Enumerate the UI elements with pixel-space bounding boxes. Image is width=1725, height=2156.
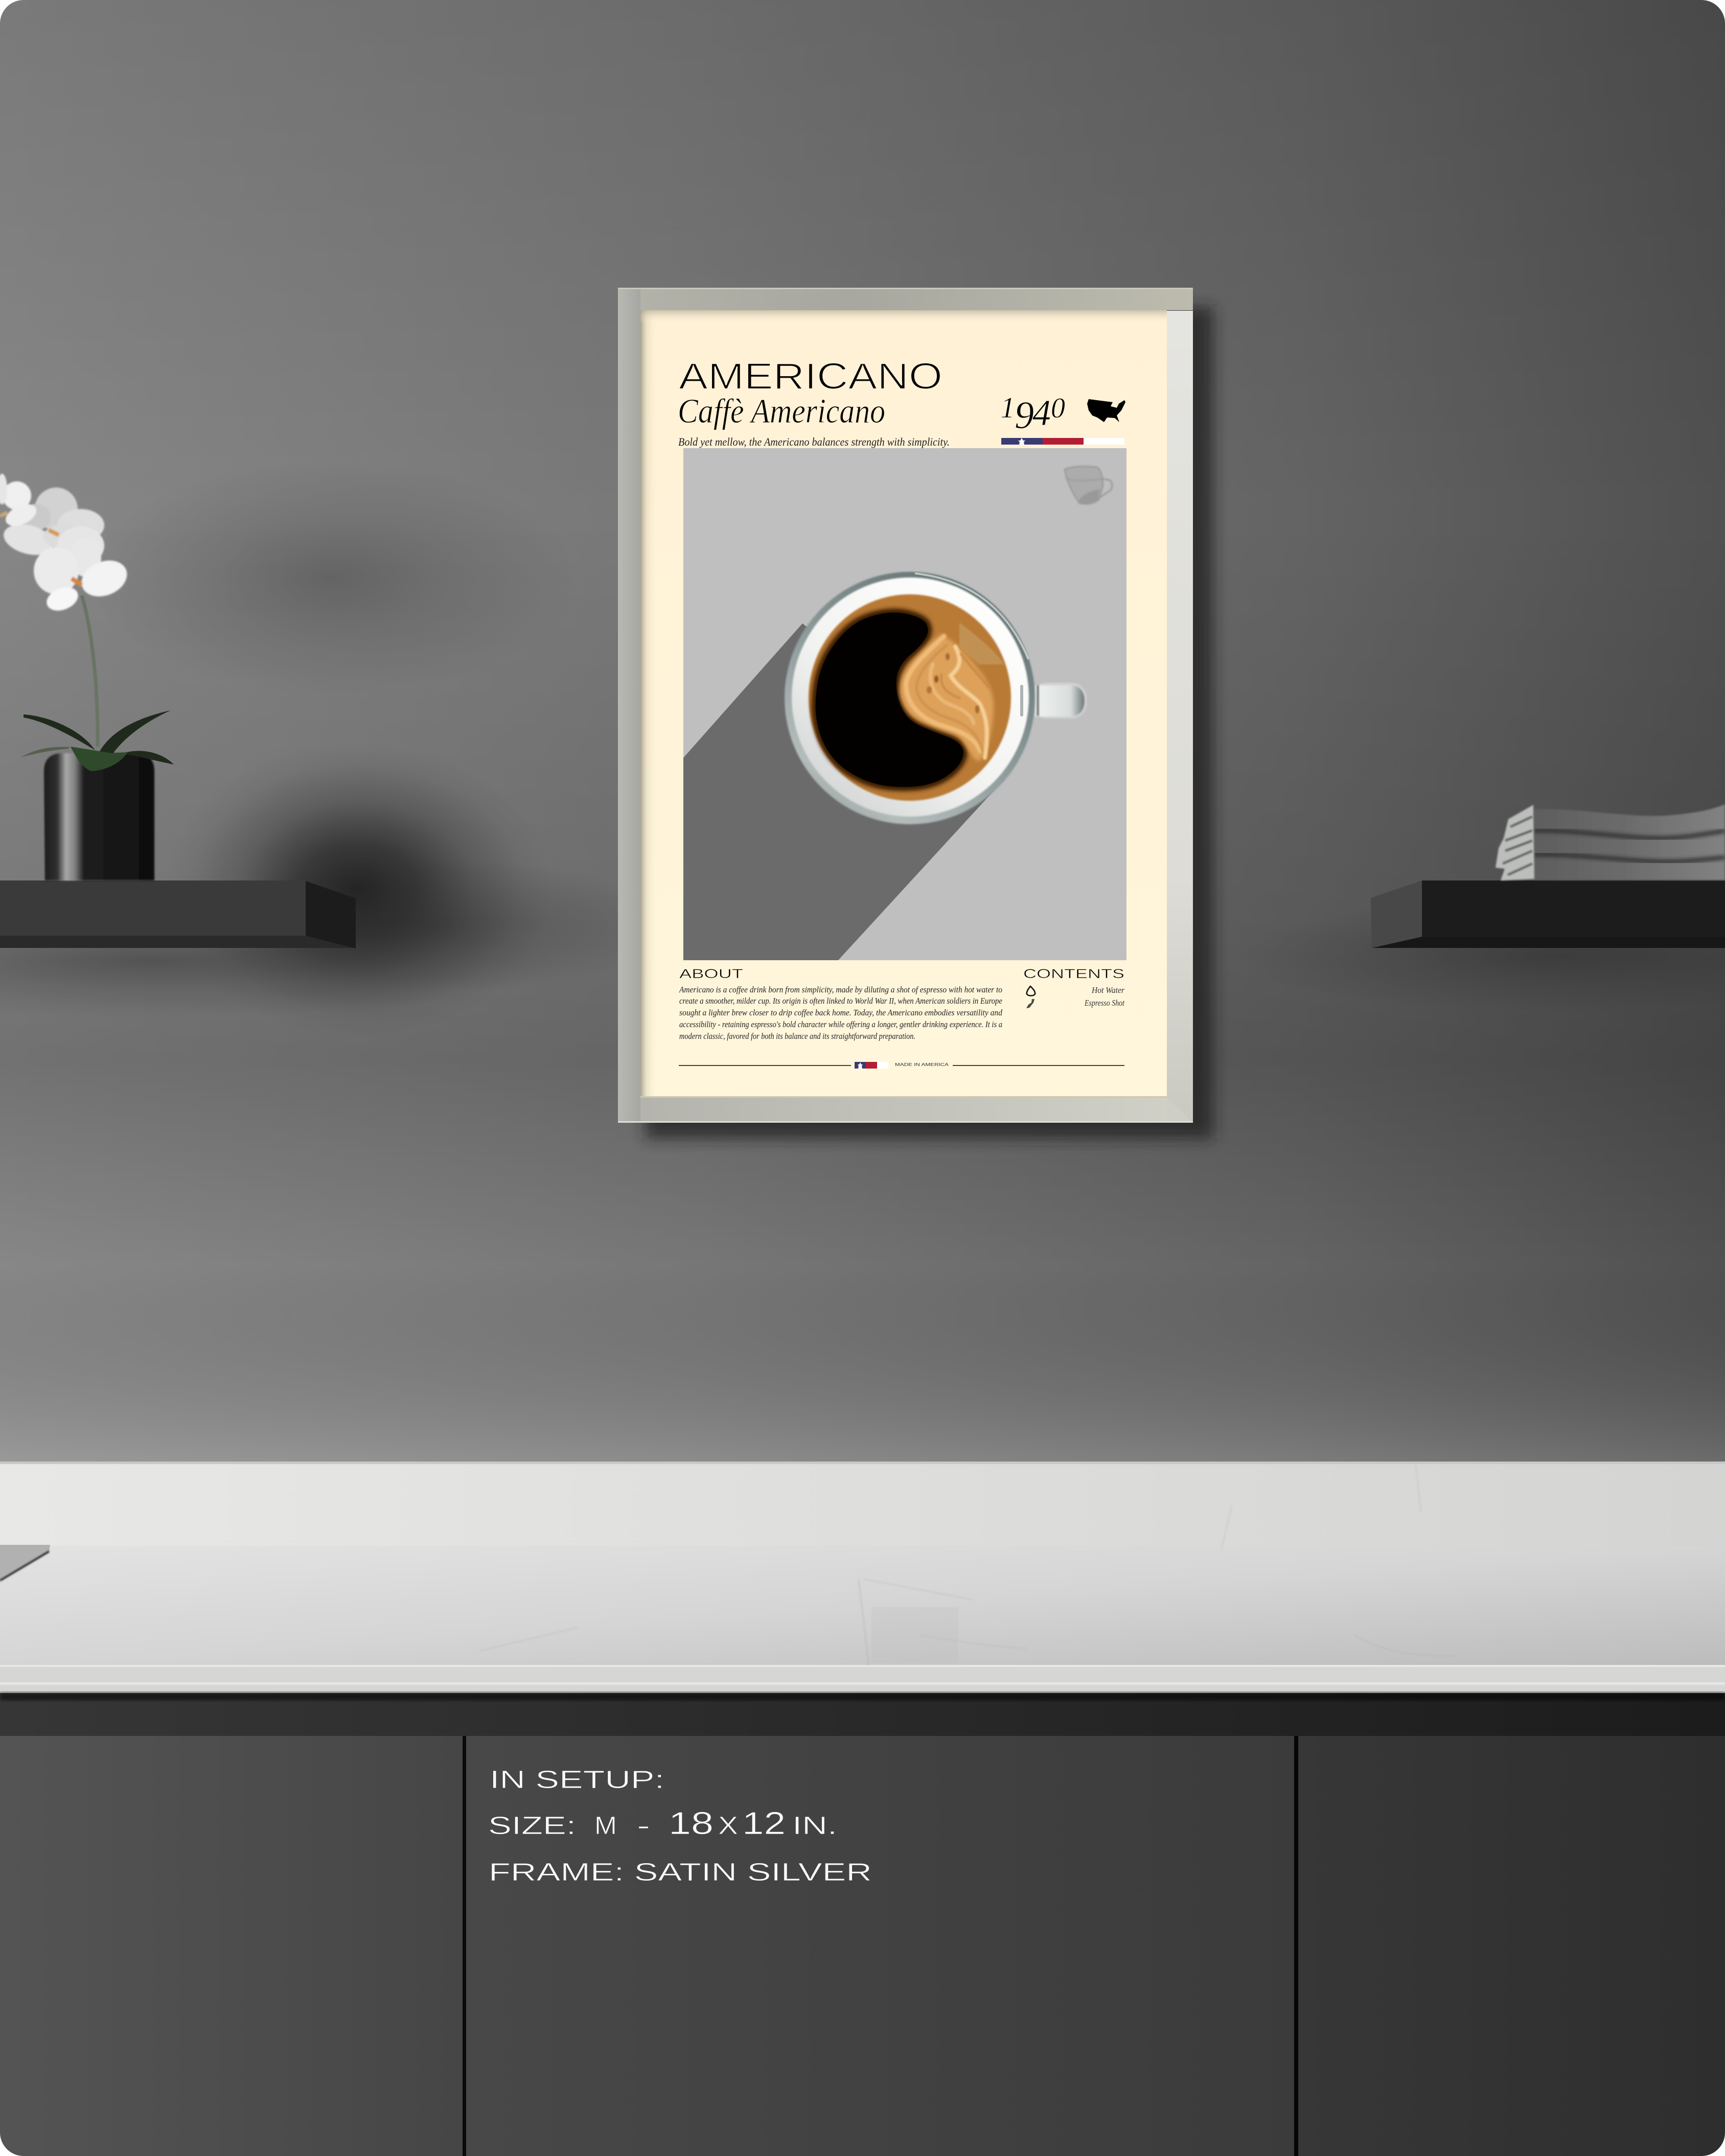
coffee cup xyxy=(785,572,1087,824)
picture frame xyxy=(618,288,1193,1123)
icon: orchid stem xyxy=(82,595,98,747)
about body text: Americano is a coffee drink born from simplicity, made by diluting a shot of espresso with hot water to xyxy=(679,985,1002,994)
crema reflection xyxy=(959,622,1004,664)
year: 4 xyxy=(1032,392,1051,433)
wall background xyxy=(0,0,1725,1472)
caption line 2: M xyxy=(594,1812,617,1840)
counter front band xyxy=(0,1693,1725,1736)
caption line 2: 18 xyxy=(669,1806,714,1841)
icon: orchid leaves xyxy=(21,710,174,771)
caption line 2: SIZE: xyxy=(488,1812,576,1840)
marble counter xyxy=(0,1462,1725,1693)
icon: glass mug xyxy=(1065,467,1112,504)
footer made in america: MADE IN AMERICA xyxy=(895,1062,949,1067)
about body text: accessibility - retaining espresso's bold character while offering a longer, gentler drinking experience. It is a xyxy=(679,1019,1002,1029)
icon: map of USA xyxy=(1087,399,1125,422)
folded towels xyxy=(1496,804,1725,880)
icon: espresso shot xyxy=(1026,999,1034,1008)
icon: vase xyxy=(44,753,154,880)
cup rim xyxy=(785,572,1035,824)
rim edge at handle xyxy=(1020,685,1023,716)
contents item: hot water: Hot Water xyxy=(1091,985,1124,995)
flag bar xyxy=(1001,438,1124,445)
cup handle xyxy=(1031,683,1087,718)
caption line 2: X xyxy=(718,1812,738,1840)
title: AMERICANO xyxy=(679,356,942,397)
footer right rule xyxy=(953,1065,1124,1066)
contents item: espresso shot: Espresso Shot xyxy=(1084,998,1125,1008)
year: 0 xyxy=(1051,392,1065,424)
subtitle: Caffè Americano xyxy=(678,391,885,430)
towel stack body xyxy=(1534,804,1725,880)
tagline: Bold yet mellow, the Americano balances strength with simplicity. xyxy=(678,435,950,448)
cabinet doors xyxy=(0,1736,1725,2156)
setup caption xyxy=(488,1766,872,1886)
footer flag xyxy=(855,1062,888,1069)
right shelf xyxy=(1371,880,1725,948)
icon: orchid flowers xyxy=(0,474,132,615)
left shelf xyxy=(0,880,356,948)
image panel xyxy=(683,448,1126,960)
about body text xyxy=(679,985,1002,1041)
about body text: create a smoother, milder cup. Its origin is often linked to World War II, when American soldiers in Europe xyxy=(679,996,1002,1006)
about body text: modern classic, favored for both its balance and its straightforward preparation. xyxy=(679,1031,915,1041)
coffee surface xyxy=(809,594,1011,801)
contents heading: CONTENTS xyxy=(1023,967,1124,981)
caption line 3: FRAME: SATIN SILVER xyxy=(489,1859,872,1886)
towel folded spine xyxy=(1496,805,1534,880)
crema swirl xyxy=(900,634,994,761)
picture frame shadow xyxy=(645,307,1213,1139)
icon: water drop xyxy=(1027,986,1035,995)
cup shadow xyxy=(683,623,1004,960)
poster paper xyxy=(640,310,1167,1098)
about body text: sought a lighter brew closer to drip coffee back home. Today, the Americano embodies versatility and xyxy=(679,1008,1002,1017)
caption line 1: IN SETUP: xyxy=(490,1766,664,1794)
about heading: ABOUT xyxy=(679,967,743,981)
caption line 2: IN. xyxy=(792,1812,837,1840)
year: 1 xyxy=(1000,391,1015,424)
caption line 2: 12 xyxy=(742,1806,786,1841)
year: 9 xyxy=(1015,394,1034,437)
caption line 2: - xyxy=(637,1812,650,1840)
laptop corner xyxy=(0,1545,50,1581)
footer left rule xyxy=(679,1065,851,1066)
black coffee xyxy=(816,613,963,787)
vase with orchid xyxy=(0,474,174,880)
